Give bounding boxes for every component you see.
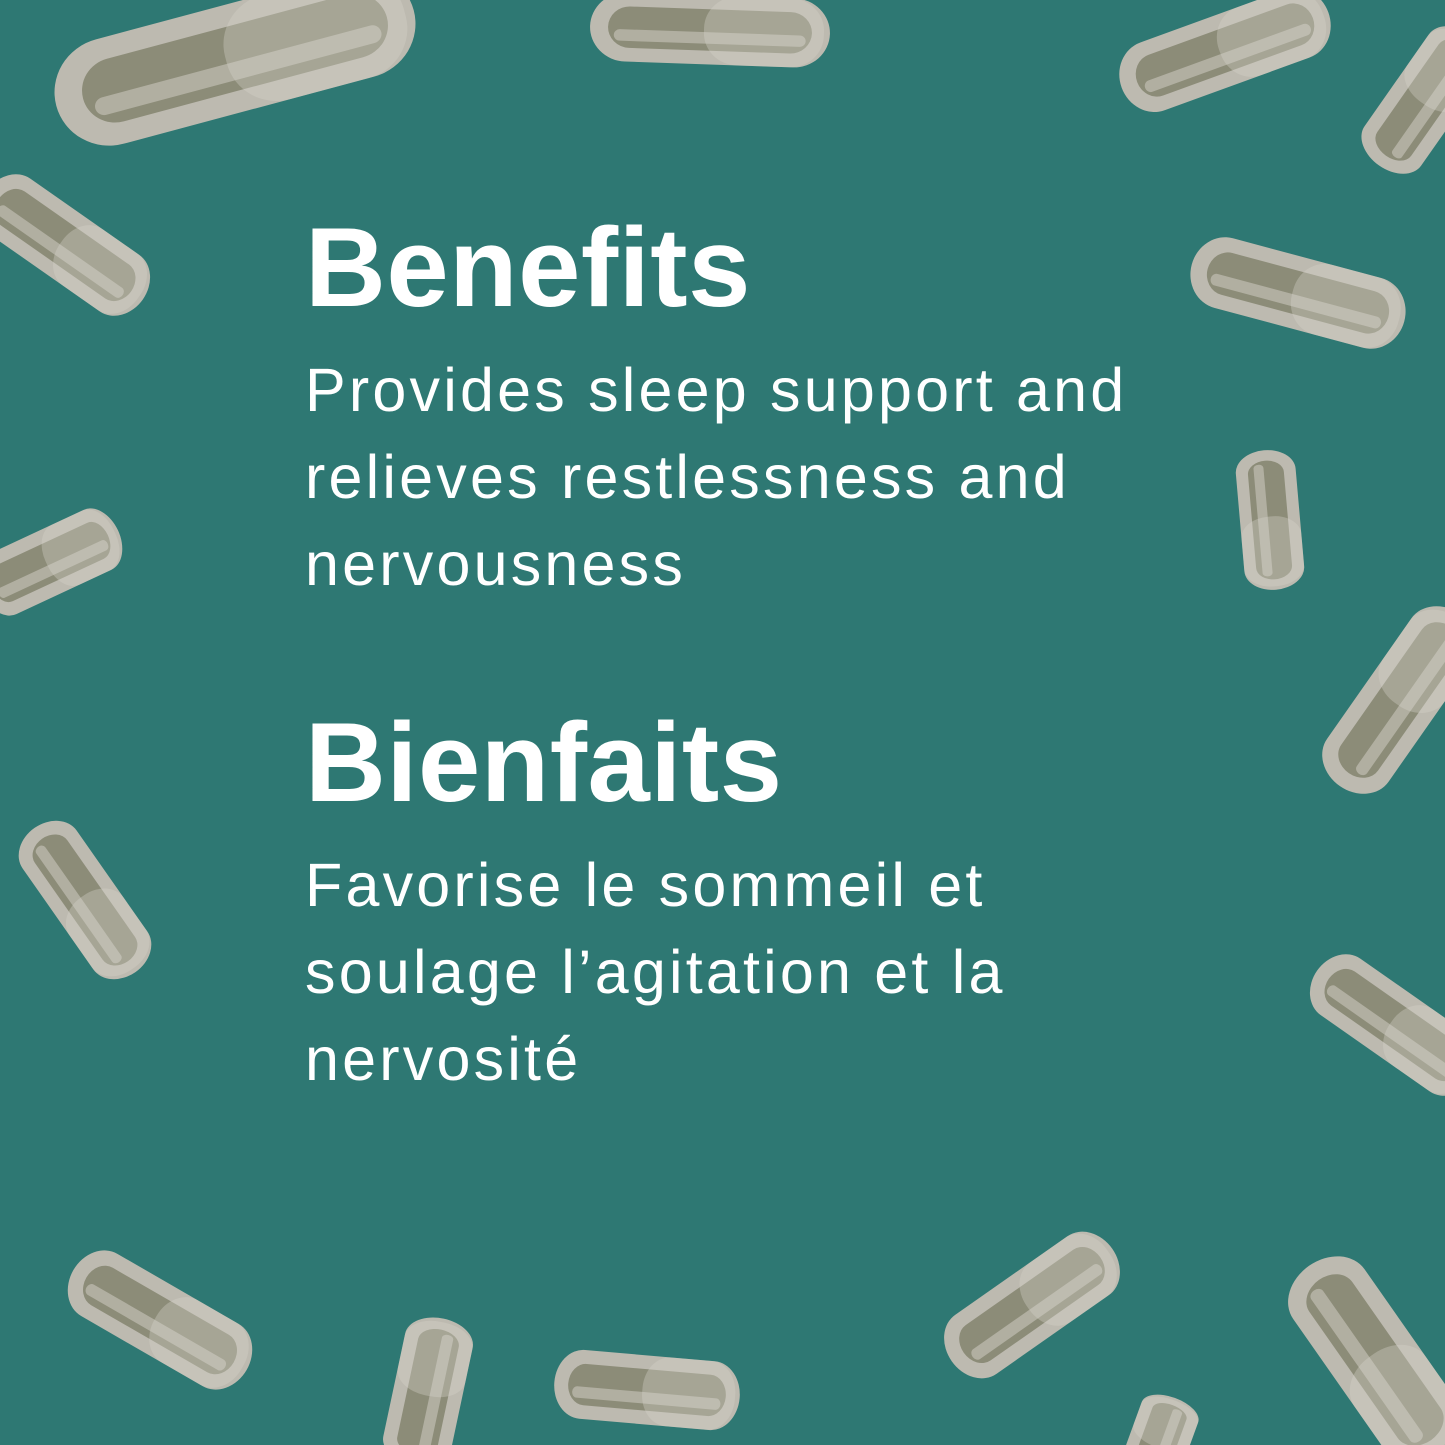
capsule 15 [931, 1219, 1133, 1391]
capsule 11 [1297, 942, 1445, 1108]
capsule 1 [42, 0, 428, 158]
text: French benefits [305, 851, 1006, 1093]
capsule 7 [0, 500, 132, 624]
capsule 13 [379, 1311, 477, 1445]
text: English benefits: relieves restlessness and [305, 443, 1070, 511]
capsule 17 [1113, 1388, 1203, 1445]
capsule 9 [1309, 592, 1445, 808]
text: English benefits [305, 356, 1127, 598]
capsule 8 [1234, 448, 1306, 592]
capsule 4 [1351, 15, 1445, 185]
text: English benefits: Provides sleep support and [305, 356, 1127, 424]
heading: Benefits: Benefits [305, 205, 751, 330]
text: English benefits: nervousness [305, 530, 686, 598]
capsule 10 [7, 809, 163, 991]
capsule 6 [1182, 230, 1414, 356]
heading: Bienfaits: Bienfaits [305, 700, 782, 825]
capsule 3 [1109, 0, 1341, 121]
text: French benefits: Favorise le sommeil et [305, 851, 986, 919]
capsule 2 [589, 0, 831, 69]
text: French benefits: soulage l’agitation et la [305, 938, 1006, 1006]
text: French benefits: nervosité [305, 1025, 581, 1093]
capsule 5 [0, 162, 163, 328]
capsule 14 [551, 1348, 743, 1432]
capsule 16 [1273, 1241, 1445, 1445]
capsule 12 [55, 1239, 265, 1401]
